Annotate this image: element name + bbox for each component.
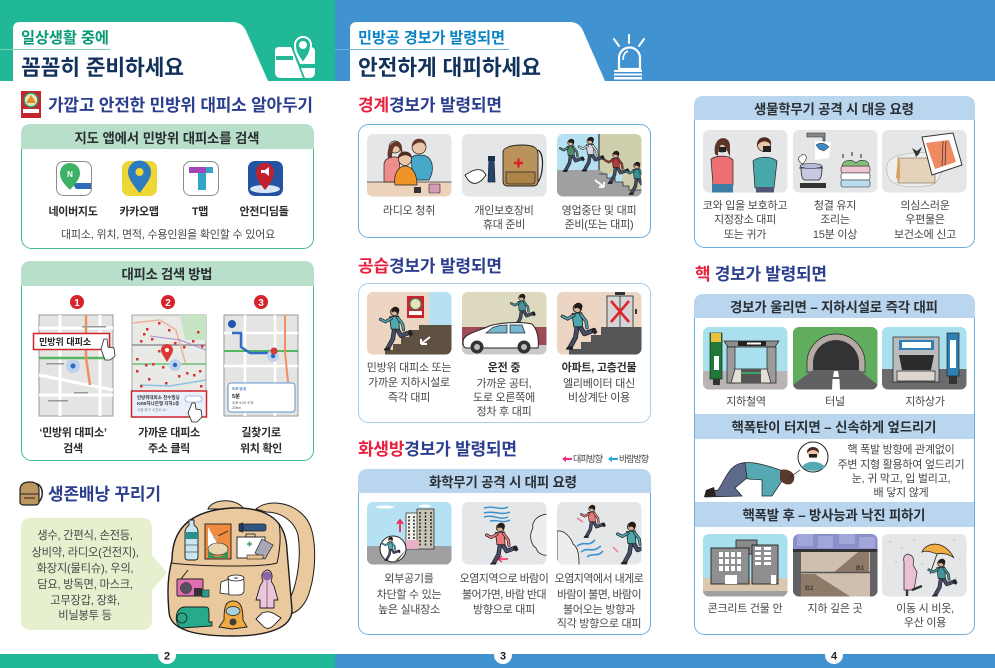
image: hygiene [793,130,878,193]
after blast captions [708,601,954,629]
heading: alert: 경계경보가 발령되면 [358,96,502,115]
chemical captions: 차단할 수 있는 [377,588,442,601]
chemical captions: 바람이 불면, 바람이 [557,588,641,601]
icon: safety stepping stone [248,161,283,196]
air raid captions: 아파트, 고층건물 [562,361,636,374]
biological captions: 의심스러운 [900,199,950,212]
step numbers: 3 [258,298,264,309]
step numbers [70,295,268,309]
biological captions: 우편물은 [905,213,945,226]
biological captions: 조리는 [820,213,850,226]
alert captions: 라디오 청취 [383,204,435,217]
panel header [694,96,975,120]
image: deep underground [793,534,878,597]
heading: chemical: 화생방경보가 발령되면 [358,440,517,459]
map 3 [224,315,298,416]
air raid captions [367,361,636,418]
callout: bag contents: 고무장갑, 장화, [50,594,120,607]
chemical captions [377,572,644,630]
app labels: 카카오맵 [119,204,159,218]
after blast captions: 콘크리트 건물 안 [708,602,782,615]
alert captions: 영업중단 및 대피 [562,204,636,217]
map 2: 서울 중구 수표로 42 [137,407,166,412]
band text: 핵폭발 후 – 방사능과 낙진 피하기 [742,508,926,523]
callout: bag contents: 화장지(물티슈), 우의, [37,562,134,575]
radio [177,570,209,597]
shelter captions: 지하상가 [905,394,945,408]
map 1 [34,315,115,416]
map 3: 오후 5:00 도착 [232,400,254,405]
air raid captions: 즉각 대피 [388,391,430,404]
result card [132,391,206,417]
after blast captions: 지하 깊은 곳 [808,601,863,615]
air raid captions: 가까운 지하시설로 [368,375,450,389]
after blast captions: 이동 시 비옷, [896,602,954,615]
chemical captions: 직각 방향으로 대피 [557,617,641,630]
callout: bag contents [21,518,167,630]
header text: 지도 앱에서 민방위 대피소를 검색 [74,131,260,146]
chemical captions: 불어오는 방향과 [563,603,635,616]
air raid captions: 엘리베이터 대신 [563,377,635,390]
backpack illustration [168,501,315,636]
image: protective gear [462,134,547,197]
page 2 title: 꼼꼼히 준비하세요 [21,56,184,80]
first aid kit and pills [237,534,273,559]
header text: 생물학무기 공격 시 대응 요령 [754,102,914,117]
alert captions: 개인보호장비 [474,204,534,217]
biological captions: 청결 유지 [814,199,856,212]
bag body [168,508,292,636]
page number 3 [494,646,512,664]
page 3 subtitle: 민방공 경보가 발령되면 [358,30,505,47]
shelter captions [726,394,945,408]
map 2: KEB하나은행 지하1층 [137,400,179,407]
step captions: 위치 확인 [240,441,282,455]
toilet roll [220,575,244,595]
page 3 title: 안전하게 대피하세요 [358,56,541,80]
image: tunnel [793,327,878,390]
biological captions: 보건소에 신고 [894,228,956,241]
step numbers: 1 [74,298,80,309]
page 2 top band [0,0,335,81]
chemical captions: 오염지역으로 바람이 [460,572,548,585]
page 2 subtitle: 일상생활 중에 [21,30,109,47]
top handle [208,501,244,509]
search text: 민방위 대피소 [39,336,91,347]
map 2: 민방위대피소 천수빌딩 [137,394,180,401]
biological captions: 15분 이상 [813,228,857,241]
band: nuclear blast [695,414,974,439]
biological captions: 지정장소 대피 [714,213,776,226]
alert captions: 준비(또는 대피) [565,218,633,231]
route card [228,383,295,412]
header text: 화학무기 공격 시 대피 요령 [429,475,577,490]
chemical captions: 오염지역에서 내게로 [555,572,644,585]
callout: bag contents: 상비약, 라디오(건전지), [32,545,139,559]
air raid captions: 운전 중 [488,361,520,374]
map 3: 238m [232,406,241,410]
icon: magnified face [789,442,828,478]
map 3: 5분 [232,392,240,400]
chemical captions: 불어가면, 바람 반대 [462,588,546,601]
panel: chemical weapons [358,469,651,634]
raincoat [256,570,278,608]
band text: 핵폭탄이 터지면 – 신속하게 엎드리기 [732,420,936,435]
image: subway [703,327,788,390]
heading: survival bag: 생존배낭 꾸리기 [48,485,161,504]
pocket line [171,523,280,566]
image: underground mall [882,327,967,390]
page number 3: 3 [500,650,506,662]
map 3: 도보 안내 [232,386,246,391]
chemical captions: 방향으로 대피 [473,603,535,616]
blast instruction text: 핵 폭발 방향에 관계없이 [847,443,955,456]
image: car stop [462,292,547,355]
band: after blast [695,502,974,527]
callout: bag contents: 비닐봉투 등 [58,609,112,622]
icon: siren [614,35,644,80]
image: cover nose and mouth [703,130,788,193]
biological captions: 코와 입을 보호하고 [703,198,787,212]
air raid captions: 정차 후 대피 [477,405,531,418]
panel header [694,294,975,318]
image: deep underground: B2 [805,585,814,592]
legend: arrows [562,453,649,464]
app labels: 안전디딤돌 [239,205,289,218]
shelter captions: 터널 [825,395,845,408]
illustration: crouching person [704,463,794,497]
heading: nuclear: 핵 경보가 발령되면 [695,265,827,284]
icon: civil defense emblem [21,91,41,118]
step captions: 주소 클릭 [148,442,190,455]
chemical captions: 높은 실내장소 [378,603,440,616]
map 2 [132,315,206,422]
callout: bag contents: 생수, 간편식, 손전등, [37,529,133,542]
air raid captions: 비상계단 이용 [568,391,630,404]
strap [256,503,315,614]
page 2 bottom bar [0,654,335,668]
image: high building [367,502,452,565]
page number 2 [158,646,176,664]
cereal box [205,524,231,559]
icon: naver map: N [67,170,73,179]
panel header [358,469,651,493]
image: raincoat and umbrella [882,534,967,597]
image: deep underground: B1 [856,565,865,572]
icon: hand [101,339,115,360]
air raid captions: 가까운 공터, [477,377,532,390]
alert captions: 휴대 준비 [483,218,525,231]
image: family radio [367,134,452,197]
app labels: T맵 [192,205,208,218]
icon: naver map [56,162,92,196]
header text: 대피소 검색 방법 [122,267,212,282]
panel: shelter search method [21,261,314,460]
water bottle [185,520,198,560]
panel: biological weapons [694,96,975,248]
panel: air raid warning [358,284,650,422]
biological captions [703,198,956,241]
image: use stairs not elevator [557,292,642,355]
app labels [48,204,289,218]
panel: map app search [21,124,314,248]
icon: small backpack [20,482,42,505]
biological captions: 또는 귀가 [724,228,766,241]
air raid captions: 민방위 대피소 또는 [367,361,451,374]
step captions: 검색 [63,442,83,455]
callout: bag contents: 담요, 방독면, 마스크, [37,578,133,591]
after blast captions: 우산 이용 [904,616,946,629]
chemical captions: 외부공기를 [384,572,434,585]
page number 4 [825,646,843,664]
icon: map pin [275,37,315,78]
blast instruction text: 배 닿지 않게 [874,485,928,499]
icon: hand [188,403,202,422]
app labels: 네이버지도 [48,205,98,218]
air raid captions: 도로 오른쪽에 [473,391,535,404]
alert captions [383,204,636,231]
step captions: 가까운 대피소 [138,425,200,439]
blast instruction text: 눈, 귀 막고, 입 벌리고, [852,472,950,485]
search box [34,334,110,350]
step captions [39,425,282,455]
heading: air raid: 공습경보가 발령되면 [358,257,502,276]
image: suspicious mail [882,130,967,193]
panel: alert warning [358,124,651,238]
image: concrete building [703,534,788,597]
image: run across wind [557,502,650,565]
blast instruction text: 주변 지형 활용하여 엎드리기 [838,457,964,471]
panel: nuclear [694,294,975,634]
page number 4: 4 [831,650,838,662]
face mask [256,612,281,628]
heading: shelter: 가깝고 안전한 민방위 대피소 알아두기 [48,95,313,115]
page 3-4 top band [335,0,995,81]
legend: arrows: 바람방향 [619,453,649,464]
step numbers: 2 [165,298,171,309]
icon: T map [184,162,218,196]
blast instruction text [838,443,964,499]
icon: kakao map [122,160,157,196]
sleeping mat [176,607,212,628]
shelter captions: 지하철역 [726,394,766,408]
note text: 대피소, 위치, 면적, 수용인원을 확인할 수 있어요 [61,228,275,241]
legend: arrows: 대피방향 [573,453,603,464]
step captions: 길찾기로 [241,425,281,439]
page number 2: 2 [164,650,170,662]
header text: 경보가 울리면 – 지하시설로 즉각 대피 [730,300,938,315]
panel header [21,261,314,286]
image: go to shelter [367,292,452,355]
image: evacuate to stairs [557,134,642,196]
page 3-4 bottom bar [335,654,995,668]
image: run against wind [462,502,547,565]
gas mask [219,601,247,629]
step captions: ‘민방위 대피소’ [39,425,107,439]
flashlight [239,523,266,532]
panel header [21,124,314,149]
